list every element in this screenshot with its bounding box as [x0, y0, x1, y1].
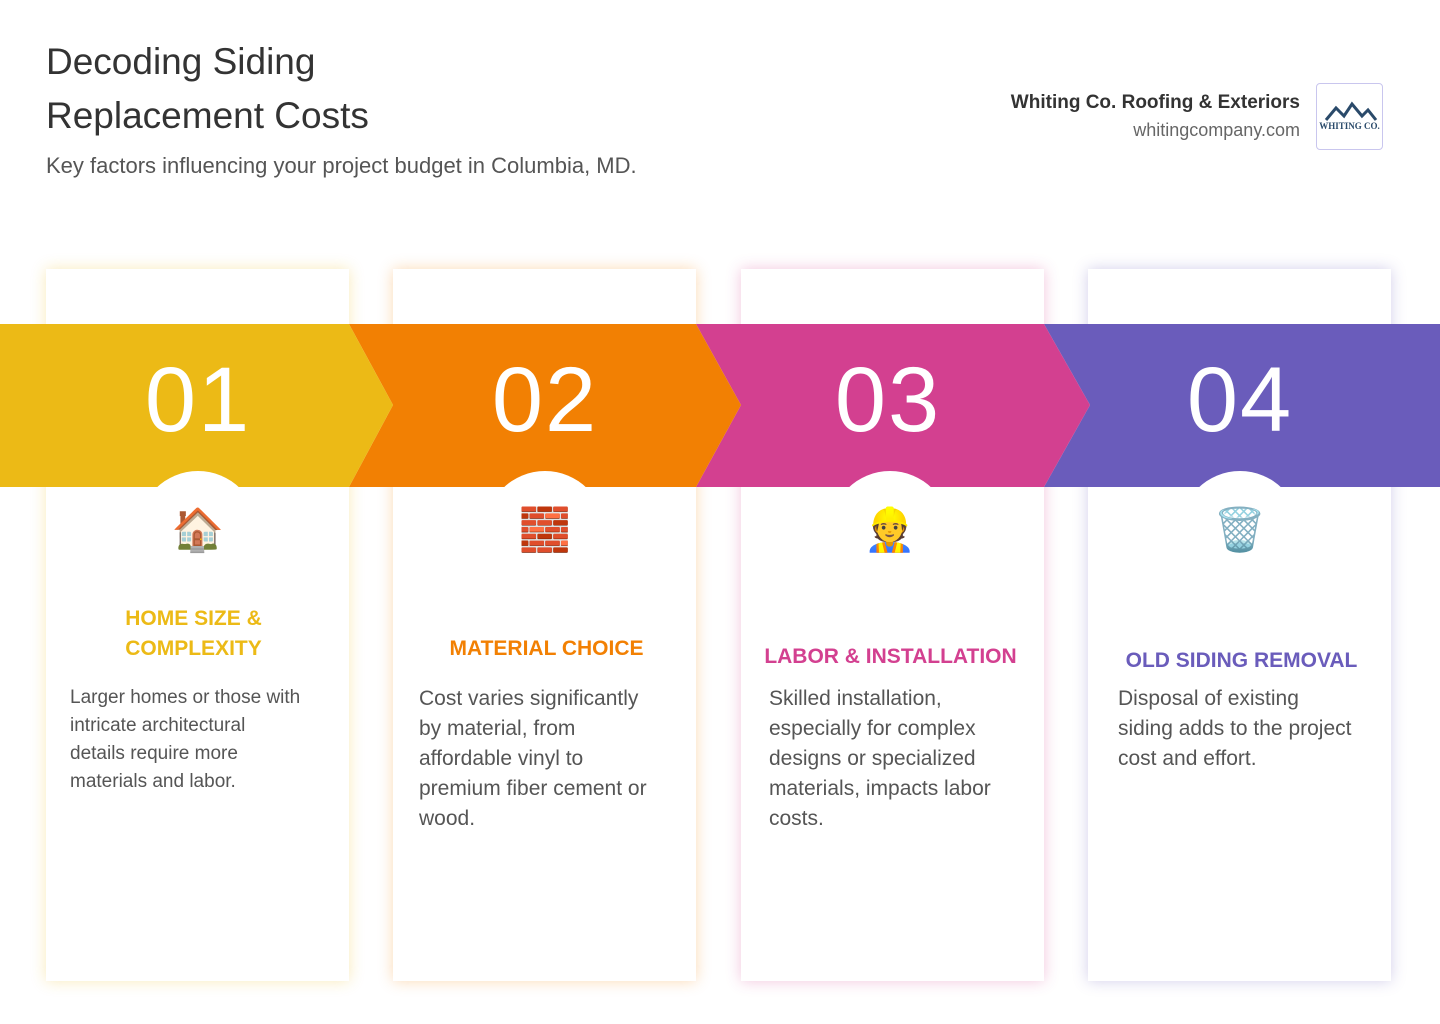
text 2: Cost varies significantly — [419, 687, 638, 710]
text: 04 — [1187, 349, 1293, 451]
logo — [1316, 83, 1383, 150]
card 1 — [46, 269, 349, 981]
heading 1: COMPLEXITY — [125, 637, 262, 660]
title — [46, 41, 369, 136]
text 3: especially for complex — [769, 717, 976, 740]
icon: trash: 🗑️ — [1214, 506, 1266, 555]
brand text: Whiting Co. Roofing & Exteriors — [1011, 92, 1300, 113]
brand text: whitingcompany.com — [1133, 120, 1300, 140]
icon: house: 🏠 — [172, 506, 224, 555]
text 4: Disposal of existing — [1118, 687, 1299, 710]
text 1: Larger homes or those with — [70, 687, 300, 708]
card 2 — [393, 269, 696, 981]
brand text — [1010, 92, 1300, 140]
text 1: details require more — [70, 743, 238, 764]
text 3: costs. — [769, 807, 824, 830]
heading 2: MATERIAL CHOICE — [449, 637, 644, 660]
text 2: premium fiber cement or — [419, 777, 647, 800]
arrow bands — [0, 324, 1440, 487]
heading 4: OLD SIDING REMOVAL — [1126, 649, 1357, 672]
text 1: intricate architectural — [70, 715, 245, 736]
text 4: siding adds to the project — [1118, 717, 1351, 740]
title: Decoding Siding — [46, 41, 315, 82]
text 3: Skilled installation, — [769, 687, 942, 710]
heading 3: LABOR & INSTALLATION — [764, 645, 1017, 668]
text 2: wood. — [419, 807, 475, 830]
text 3: materials, impacts labor — [769, 777, 991, 800]
text: 02 — [492, 349, 598, 451]
text 3 — [769, 687, 991, 830]
text 1 — [70, 687, 300, 792]
card 3 — [741, 269, 1044, 981]
icon circles — [138, 471, 258, 591]
heading 1 — [125, 607, 262, 660]
text 2: affordable vinyl to — [419, 747, 583, 770]
subtitle: Key factors influencing your project budget in Columbia, MD. — [46, 153, 637, 178]
text 2 — [419, 687, 647, 830]
card 4 — [1088, 269, 1391, 981]
icon: worker: 👷 — [864, 506, 916, 555]
text: 03 — [835, 349, 941, 451]
numbers: 01 — [145, 349, 251, 451]
icon: brick: 🧱 — [519, 506, 571, 555]
text 4 — [1118, 687, 1352, 770]
title: Replacement Costs — [46, 95, 369, 136]
text 3: designs or specialized — [769, 747, 976, 770]
text 1: materials and labor. — [70, 771, 236, 792]
text 4: cost and effort. — [1118, 747, 1257, 770]
text 2: by material, from — [419, 717, 575, 740]
logo: WHITING CO. — [1319, 121, 1380, 131]
heading 1: HOME SIZE & — [125, 607, 262, 630]
